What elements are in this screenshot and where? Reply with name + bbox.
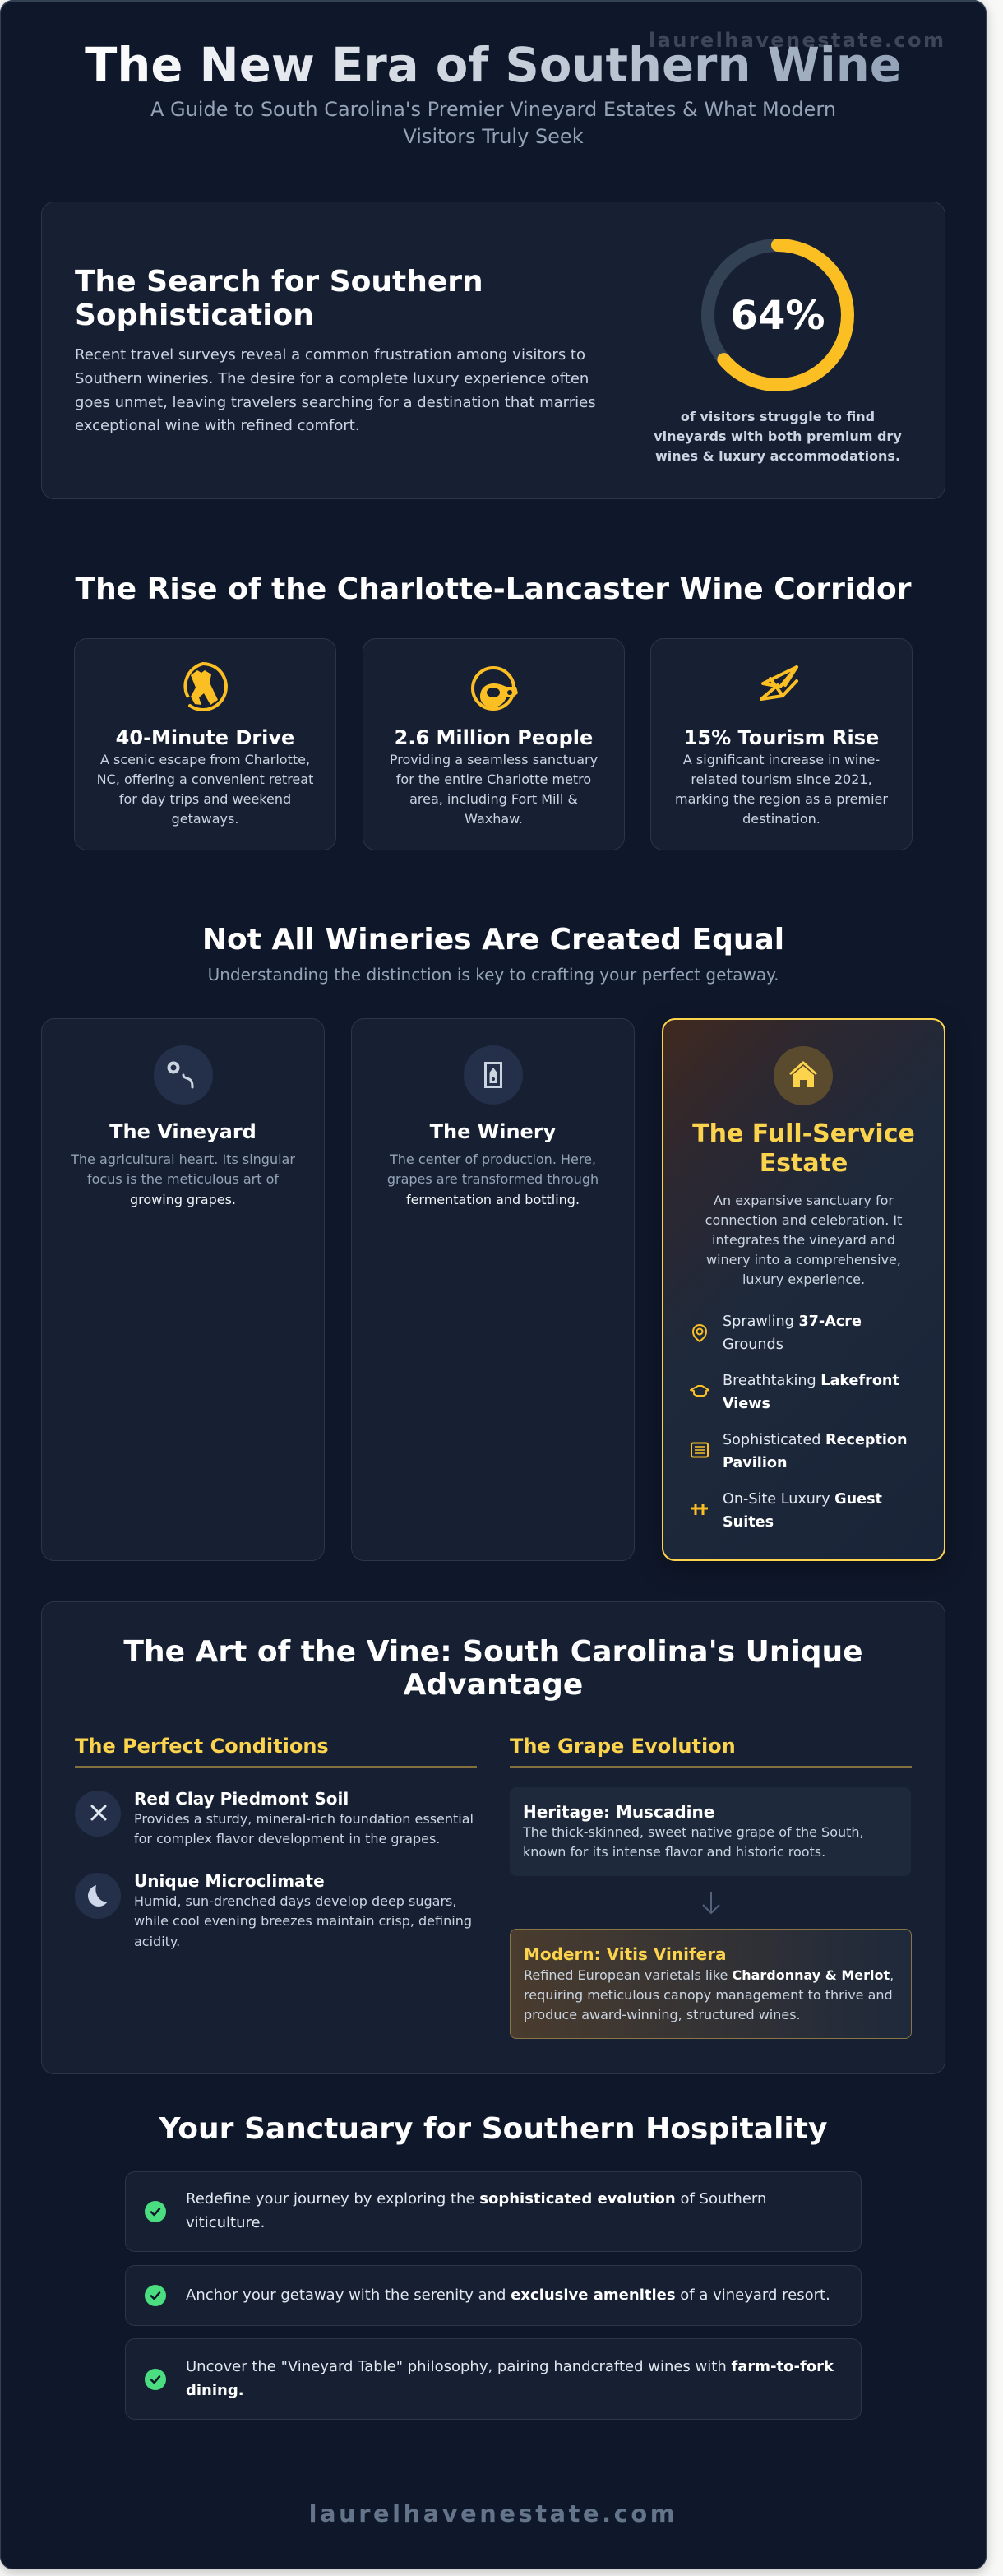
item description: while cool evening breezes maintain crisp, defining — [134, 1913, 472, 1929]
column heading: perfect conditions: The Perfect Conditions — [75, 1735, 329, 1758]
feature text: Breathtaking Lakefront — [723, 1373, 899, 1389]
feature: 37-acre grounds — [692, 1313, 862, 1353]
panel: art of the vine — [41, 1601, 945, 2074]
item description: acidity. — [134, 1934, 180, 1949]
stat description: Waxhaw. — [465, 811, 523, 827]
feature: lakefront views — [690, 1373, 899, 1412]
box text: requiring meticulous canopy management to thrive and — [524, 1987, 893, 2003]
body text: exceptional wine with refined comfort. — [75, 417, 360, 434]
takeaway text: Anchor your getaway with the serenity and exclusive amenities of a vineyard resort. — [186, 2286, 830, 2304]
heading: Advantage — [404, 1668, 583, 1702]
donut chart: 64%: 64% — [731, 293, 825, 339]
feature text: Grounds — [723, 1337, 783, 1353]
stat description: for the entire Charlotte metro — [396, 771, 591, 787]
stat description: Providing a seamless sanctuary — [390, 752, 598, 767]
item description — [134, 1893, 472, 1949]
takeaway text: dining. — [186, 2382, 244, 2399]
card title: The Winery — [430, 1120, 556, 1143]
watermark: top domain: laurelhavenestate.com — [649, 29, 945, 52]
takeaway text: Redefine your journey by exploring the sophisticated evolution of Southern — [186, 2190, 766, 2208]
item description: Provides a sturdy, mineral-rich foundation essential — [134, 1811, 474, 1827]
box text: The thick-skinned, sweet native grape of the South, — [523, 1824, 864, 1840]
box title: Modern: Vitis Vinifera — [524, 1944, 727, 1964]
item title: Red Clay Piedmont Soil — [134, 1789, 349, 1809]
title: The New Era of Southern Wine — [85, 38, 902, 93]
stat description — [97, 752, 313, 827]
card description — [387, 1151, 599, 1207]
panel: the full-service estate — [662, 1018, 945, 1561]
box text: Refined European varietals like Chardonnay & Merlot, — [524, 1967, 894, 1983]
takeaway 3 — [125, 2338, 862, 2420]
icon: moon — [75, 1873, 121, 1919]
icon: wine bottle — [464, 1045, 523, 1105]
card description: The agricultural heart. Its singular — [71, 1151, 295, 1167]
heading — [75, 265, 483, 332]
stat title: 15% Tourism Rise — [684, 726, 879, 749]
footer domain: laurelhavenestate.com — [309, 2500, 677, 2527]
subheading: Understanding the distinction is key to crafting your perfect getaway. — [208, 965, 779, 985]
icon: bed — [691, 1504, 708, 1515]
card title: The Full-Service — [692, 1119, 915, 1148]
card title — [692, 1119, 915, 1178]
takeaway 1 — [125, 2171, 862, 2252]
card description: integrates the vineyard and — [712, 1232, 895, 1248]
stat description: marking the region as a premier — [675, 791, 888, 807]
card description: winery into a comprehensive, — [706, 1252, 901, 1267]
panel: 2.6 million people — [363, 638, 625, 850]
stat description — [390, 752, 598, 827]
heading — [123, 1635, 863, 1702]
arrow: down — [702, 1892, 720, 1915]
stat description: destination. — [742, 811, 820, 827]
box text — [523, 1824, 864, 1860]
item title: Unique Microclimate — [134, 1871, 325, 1891]
icon: house — [774, 1046, 833, 1105]
panel: 15% tourism rise — [650, 638, 913, 850]
heading: wine corridor: The Rise of the Charlotte-Lancaster Wine Corridor — [76, 572, 911, 606]
heading: The Search for Southern — [75, 265, 483, 299]
heading: sanctuary: Your Sanctuary for Southern Hospitality — [159, 2112, 827, 2146]
card title: The Vineyard — [109, 1120, 257, 1143]
heading: not all wineries: Not All Wineries Are Created Equal — [202, 923, 784, 957]
card description — [71, 1151, 295, 1207]
heading: The Art of the Vine: South Carolina's Unique — [123, 1635, 863, 1669]
item: microclimate — [75, 1871, 472, 1949]
feature text: Sprawling 37-Acre — [723, 1313, 862, 1330]
stat description: A significant increase in wine- — [683, 752, 880, 767]
item description: for complex flavor development in the grapes. — [134, 1831, 440, 1846]
card description — [705, 1193, 902, 1287]
icon: road — [183, 662, 228, 711]
card description: connection and celebration. It — [705, 1212, 902, 1228]
card description: The center of production. Here, — [390, 1151, 596, 1167]
takeaway text — [186, 2356, 834, 2403]
icon: people — [471, 666, 518, 711]
card description: fermentation and bottling. — [406, 1192, 580, 1207]
body text: Southern wineries. The desire for a complete luxury experience often — [75, 370, 589, 387]
takeaway text — [186, 2190, 766, 2231]
box title: Heritage: Muscadine — [523, 1802, 714, 1822]
icon: vine — [154, 1045, 213, 1105]
stat description: getaways. — [172, 811, 238, 827]
feature text: Pavilion — [723, 1455, 787, 1471]
subtitle: Visitors Truly Seek — [403, 125, 584, 148]
icon: check — [145, 2201, 166, 2222]
body text: goes unmet, leaving travelers searching for a destination that marries — [75, 394, 596, 411]
takeaway text: Uncover the "Vineyard Table" philosophy, pairing handcrafted wines with farm-to-fork — [186, 2358, 834, 2375]
feature text: Sophisticated Reception — [723, 1432, 908, 1448]
icon: trend — [760, 665, 799, 701]
card title: Estate — [760, 1149, 848, 1178]
donut caption: vineyards with both premium dry — [654, 429, 902, 444]
icon: check — [145, 2285, 166, 2306]
feature: guest suites — [691, 1491, 882, 1531]
donut chart: 64% — [701, 239, 854, 391]
card description: growing grapes. — [130, 1192, 236, 1207]
stat title: 40-Minute Drive — [116, 726, 294, 749]
icon: boat — [690, 1385, 709, 1397]
feature text: On-Site Luxury Guest — [723, 1491, 882, 1508]
takeaway text: viticulture. — [186, 2214, 265, 2231]
panel: the vineyard — [41, 1018, 325, 1561]
box text: produce award-winning, structured wines. — [524, 2007, 801, 2022]
box text — [524, 1967, 894, 2022]
panel: the winery — [351, 1018, 635, 1561]
feature: reception pavilion — [691, 1432, 908, 1471]
stat description — [675, 752, 888, 827]
body text: Recent travel surveys reveal a common frustration among visitors to — [75, 346, 585, 364]
item: red clay soil — [75, 1789, 474, 1846]
feature text: Views — [723, 1396, 770, 1412]
icon: x — [75, 1791, 121, 1837]
stat description: for day trips and weekend — [119, 791, 291, 807]
card description: An expansive sanctuary for — [714, 1193, 894, 1208]
panel: search for southern sophistication — [41, 202, 945, 499]
stat description: related tourism since 2021, — [691, 771, 872, 787]
donut caption: wines & luxury accommodations. — [655, 448, 900, 464]
feature text — [723, 1491, 882, 1531]
stat description: NC, offering a convenient retreat — [97, 771, 313, 787]
takeaway 2 — [125, 2265, 862, 2326]
subtitle — [150, 98, 836, 148]
feature text: Suites — [723, 1514, 774, 1531]
card description: luxury experience. — [742, 1272, 865, 1287]
box: heritage muscadine — [510, 1787, 911, 1876]
body text — [75, 346, 596, 434]
stat title: 2.6 Million People — [395, 726, 593, 749]
box text: known for its intense flavor and historic roots. — [523, 1844, 825, 1860]
heading: Sophistication — [75, 299, 314, 332]
stat description: A scenic escape from Charlotte, — [100, 752, 310, 767]
icon: pin — [692, 1324, 707, 1342]
card description: focus is the meticulous art of — [87, 1171, 279, 1187]
item description — [134, 1811, 474, 1846]
icon: list — [691, 1443, 709, 1457]
stat description: area, including Fort Mill & — [409, 791, 578, 807]
donut caption — [654, 409, 902, 464]
feature text — [723, 1313, 862, 1353]
panel: 40-minute drive — [74, 638, 336, 850]
box: modern vitis vinifera — [510, 1929, 912, 2039]
icon: check — [145, 2369, 166, 2390]
feature text — [723, 1432, 908, 1471]
item description: Humid, sun-drenched days develop deep sugars, — [134, 1893, 456, 1909]
column heading: grape evolution: The Grape Evolution — [510, 1735, 736, 1758]
subtitle: A Guide to South Carolina's Premier Vineyard Estates & What Modern — [150, 98, 836, 121]
feature text — [723, 1373, 899, 1412]
donut caption: of visitors struggle to find — [681, 409, 875, 424]
card description: grapes are transformed through — [387, 1171, 599, 1187]
